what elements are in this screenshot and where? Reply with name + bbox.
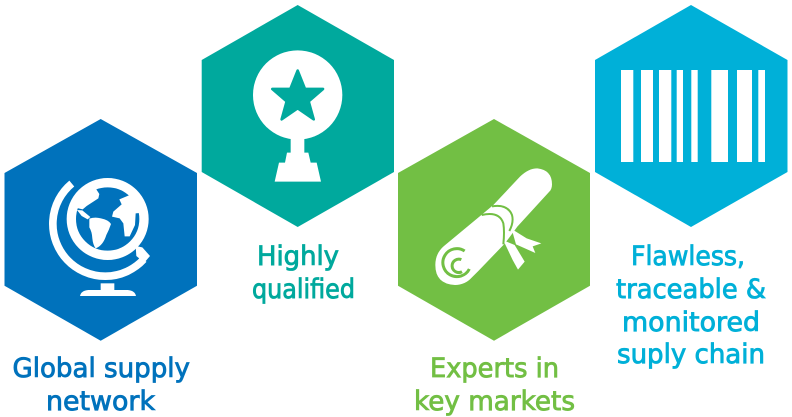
- label: highly qualified: [252, 241, 355, 305]
- hexagon: teal: [202, 5, 394, 227]
- icon: barcode: [621, 70, 765, 162]
- label: flawless traceable monitored suply chain: [616, 241, 766, 370]
- panel: experts in key markets: [398, 119, 590, 417]
- icon: trophy with star: [253, 50, 342, 182]
- label: flawless traceable monitored suply chain: monitored: [622, 307, 760, 338]
- label: experts in key markets: Experts in: [430, 353, 559, 384]
- label: flawless traceable monitored suply chain: traceable &: [616, 274, 766, 305]
- label: global supply network: network: [46, 386, 155, 417]
- hexagon: green: [398, 119, 590, 341]
- label: highly qualified: qualified: [252, 274, 355, 305]
- label: flawless traceable monitored suply chain: Flawless,: [631, 241, 745, 272]
- label: experts in key markets: [414, 353, 575, 417]
- label: global supply network: [12, 353, 190, 417]
- label: flawless traceable monitored suply chain: suply chain: [617, 339, 765, 370]
- label: highly qualified: Highly: [257, 241, 339, 272]
- hexagon: blue: [4, 119, 197, 341]
- icon: globe: [53, 183, 150, 296]
- hexagon: cyan: [595, 5, 788, 227]
- panel: highly qualified: [202, 5, 394, 305]
- panel: global supply network: [4, 119, 197, 417]
- icon: diploma scroll: [435, 168, 552, 285]
- label: global supply network: Global supply: [12, 353, 190, 384]
- label: experts in key markets: key markets: [414, 386, 575, 417]
- panel: flawless traceable supply chain: [595, 5, 788, 370]
